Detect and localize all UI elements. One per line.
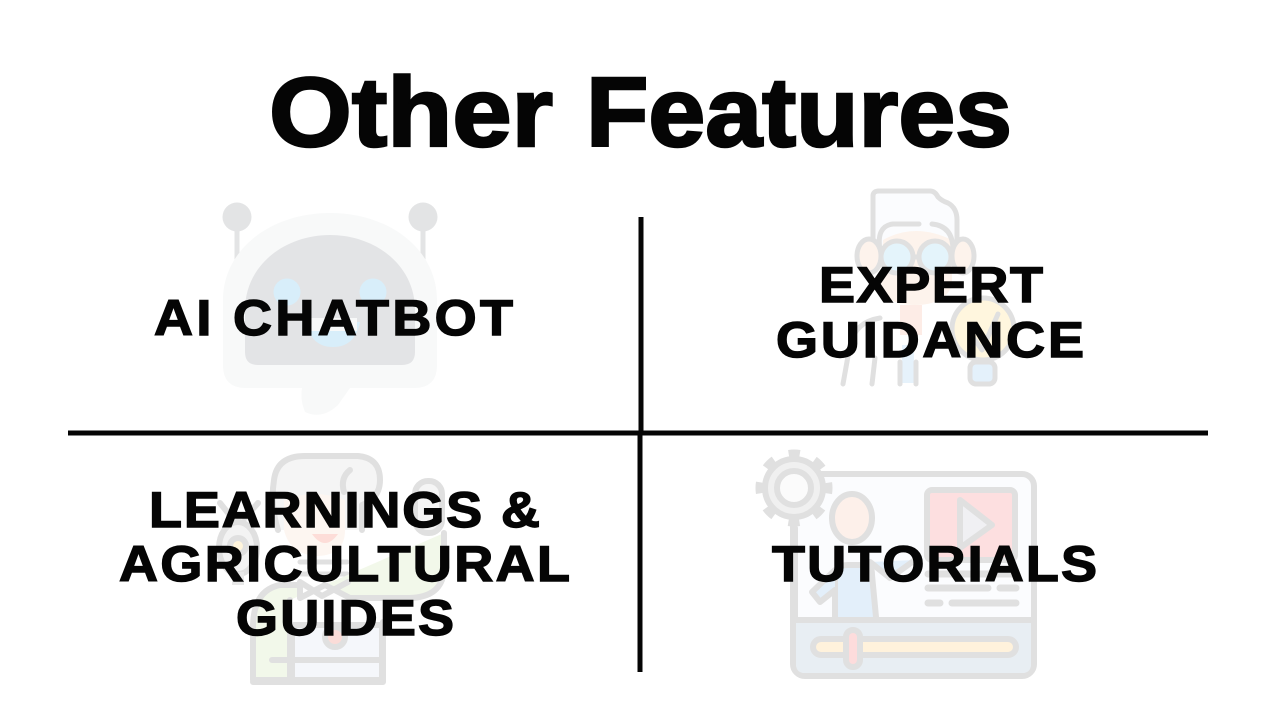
heading: AI chatbot: AI CHATBOT	[154, 291, 513, 347]
heading: expert guidance: EXPERT	[819, 258, 1043, 314]
heading: expert guidance: GUIDANCE	[776, 313, 1084, 369]
heading: expert guidance	[776, 258, 1084, 369]
heading: learnings and agricultural guides: AGRICULTURAL	[119, 537, 570, 593]
icon: expert with lightbulb	[843, 191, 1014, 384]
heading: learnings and agricultural guides: GUIDES	[236, 591, 454, 647]
horizontal divider	[68, 430, 1208, 436]
icon: learner with book and plant	[219, 456, 444, 682]
icon: video tutorial	[760, 454, 1034, 676]
title: Other	[269, 57, 553, 167]
heading: learnings and agricultural guides	[119, 483, 570, 647]
title	[269, 57, 1012, 167]
title: Features	[586, 57, 1012, 167]
heading: tutorials: TUTORIALS	[772, 537, 1097, 593]
icon: robot chatbot	[222, 202, 438, 415]
heading: learnings and agricultural guides: LEARNINGS &	[149, 483, 540, 539]
vertical divider	[638, 217, 644, 672]
